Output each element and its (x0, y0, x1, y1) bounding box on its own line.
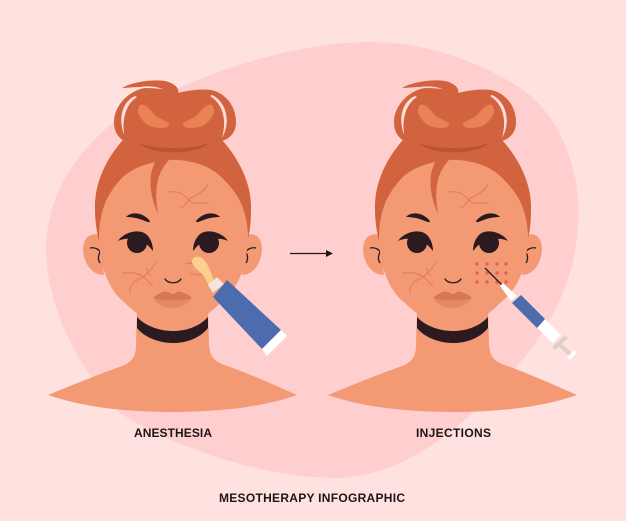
left eye (118, 231, 153, 253)
face (99, 160, 248, 326)
right eye (473, 231, 508, 253)
bun lights (418, 105, 494, 128)
hair back (375, 140, 531, 242)
hair back (95, 140, 251, 242)
injection dots (475, 262, 508, 284)
ear details (370, 248, 536, 263)
hair strand (430, 158, 450, 214)
neck and shoulders (48, 310, 297, 412)
bun highlights (121, 95, 227, 138)
right ear (242, 234, 262, 275)
hair bun (394, 88, 516, 153)
lips (153, 292, 192, 308)
nose (445, 279, 461, 283)
choker (137, 317, 208, 343)
title: MESOTHERAPY INFOGRAPHIC (219, 491, 405, 505)
bun highlights (401, 95, 507, 138)
forehead wrinkle (169, 184, 209, 208)
neck and shoulders (328, 310, 577, 412)
cream (192, 257, 214, 286)
bun wisp (402, 80, 458, 94)
choker (417, 317, 488, 343)
label: anesthesia: ANESTHESIA (134, 426, 212, 440)
cheek wrinkle (122, 261, 158, 293)
small wrinkle (185, 263, 203, 275)
arrow (290, 250, 333, 257)
cream tube (208, 277, 287, 356)
bun shadow (137, 142, 210, 152)
face (379, 160, 528, 326)
left ear (363, 234, 384, 275)
label: injections: INJECTIONS (416, 426, 491, 440)
woman: injections (328, 80, 577, 412)
forehead wrinkle (449, 184, 489, 208)
ear details (90, 248, 256, 263)
left ear (83, 234, 104, 275)
woman: anesthesia (48, 80, 297, 412)
cheek wrinkle (402, 261, 438, 293)
hair bun (114, 88, 236, 153)
left eyebrow (406, 213, 430, 222)
hair strand (150, 158, 170, 214)
bun lights (138, 105, 214, 128)
right eyebrow (196, 213, 220, 222)
background blob (46, 42, 579, 478)
right ear (522, 234, 542, 275)
syringe (485, 268, 577, 360)
right eyebrow (476, 213, 500, 222)
bun shadow (417, 142, 490, 152)
left eye (398, 231, 433, 253)
lips (433, 292, 472, 308)
right eye (193, 231, 228, 253)
nose (165, 279, 181, 283)
left eyebrow (126, 213, 150, 222)
bun wisp (122, 80, 178, 94)
